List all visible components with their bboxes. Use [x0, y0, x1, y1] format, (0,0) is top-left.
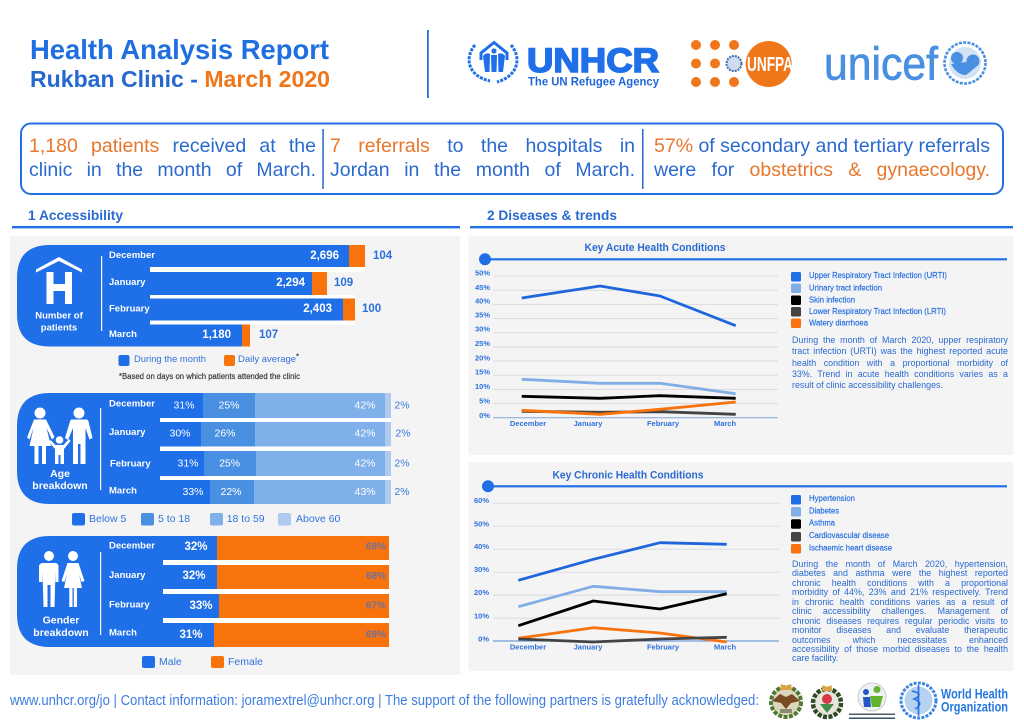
logo: Jordan crest two	[813, 685, 841, 717]
chart: gender breakdown: 32%	[184, 541, 208, 553]
chart: age breakdown: breakdown	[32, 480, 88, 492]
title	[30, 34, 330, 92]
legend: patients: During the month	[134, 354, 206, 365]
legend: age: 18 to 59	[227, 513, 265, 525]
logo: WHO: World Health	[941, 686, 1008, 702]
icon: family	[27, 408, 92, 464]
chart: chronic line chart: February	[647, 642, 680, 652]
panel: acute conditions: Key Acute Health Conditions	[584, 242, 726, 254]
heading: diseases and trends: 2 Diseases & trends	[487, 208, 617, 223]
chart: number of patients: patients	[41, 322, 77, 334]
chart: age breakdown: 42%	[354, 400, 376, 412]
legend: patients: *	[296, 353, 299, 360]
text: chronic commentary: outcomes which necessitates enhanced	[792, 635, 1008, 645]
legend: age	[72, 513, 341, 526]
chart: acute line chart: 10%	[475, 382, 490, 391]
text: chronic commentary: During the month of March 2020, hypertension,	[792, 559, 1008, 569]
text: chronic commentary: morbidity of 44%, 23% and 21% respectively. Trend	[792, 587, 1008, 597]
chart: age breakdown: 2%	[394, 486, 410, 498]
summary: referrals: 7 referrals to the hospitals in	[330, 135, 635, 157]
partner logos	[771, 683, 1008, 719]
legend: acute: Skin infection	[809, 296, 855, 304]
chart: chronic line chart: March	[714, 642, 736, 652]
text: acute commentary: result of clinic accessibility challenges.	[792, 380, 943, 390]
chart: gender breakdown: 68%	[366, 542, 386, 552]
chart: number of patients: 2,696	[310, 250, 339, 262]
text: chronic commentary: chronic health conditions with a proportional	[792, 578, 1008, 588]
chart: gender breakdown: January	[109, 570, 146, 581]
chart: acute line chart: 45%	[475, 283, 490, 292]
chart: gender breakdown: 33%	[189, 600, 213, 612]
chart: acute line chart: 35%	[475, 310, 490, 320]
legend: patients	[118, 353, 300, 381]
legend: acute: Urinary tract infection	[809, 284, 882, 292]
chart: age breakdown: 31%	[177, 458, 199, 470]
chart: number of patients: December	[109, 250, 155, 261]
chart: acute line chart: 20%	[475, 354, 490, 362]
chart: acute line chart: February	[647, 419, 680, 428]
logo: UNFPA	[691, 40, 793, 87]
legend: patients: *Based on days on which patients attended the clinic	[119, 372, 300, 381]
summary: obstetrics: 57% of secondary and tertiary referrals	[654, 135, 990, 157]
summary box	[21, 124, 1003, 194]
text: chronic commentary	[792, 559, 1008, 663]
summary: patients: 1,180 patients received at the	[29, 135, 316, 157]
chart: acute line chart: 50%	[475, 268, 490, 278]
chart: number of patients: 107	[259, 329, 278, 341]
text: acute commentary	[792, 335, 1008, 390]
logo: WHO	[901, 683, 1008, 718]
chart: gender breakdown	[17, 536, 389, 668]
chart: age breakdown: 42%	[354, 428, 376, 440]
summary: patients: clinic in the month of March.	[29, 159, 316, 181]
chart: gender breakdown: breakdown	[33, 627, 89, 639]
chart: gender breakdown: Gender	[43, 614, 79, 626]
icon: man and woman	[39, 551, 84, 607]
text: chronic commentary: diabetes and asthma were the highest reported	[792, 568, 1008, 578]
summary: obstetrics: were for obstetrics & gynaecology.	[654, 159, 990, 181]
chart: acute line chart: 5%	[479, 396, 490, 406]
text: acute commentary: 33%. Trend in acute health conditions varies as a	[792, 369, 1008, 379]
chart: age breakdown: January	[109, 427, 146, 438]
legend: chronic: Diabetes	[809, 506, 839, 516]
chart: chronic line chart: 0%	[478, 634, 489, 644]
legend: gender: Male	[159, 656, 182, 668]
legend: acute: Watery diarrhoea	[809, 318, 869, 328]
panel: chronic conditions: Key Chronic Health Conditions	[552, 470, 704, 482]
chart: chronic line chart: January	[574, 642, 603, 652]
chart: gender breakdown: 67%	[366, 600, 386, 612]
chart: acute line chart: 30%	[475, 324, 490, 334]
text: chronic commentary: accessibility of those morbid diseases to the health	[792, 644, 1008, 654]
chart: age breakdown: February	[110, 458, 151, 470]
chart: age breakdown: 30%	[169, 428, 191, 440]
legend: age: Below 5	[89, 513, 127, 525]
chart: acute line chart: 25%	[475, 339, 490, 348]
chart: gender breakdown: 69%	[366, 630, 386, 640]
chart: age breakdown	[17, 393, 411, 526]
summary: referrals: Jordan in the month of March.	[330, 159, 635, 181]
chart: number of patients: 100	[362, 303, 381, 315]
chart: chronic line chart: 30%	[474, 565, 489, 574]
logo: UNHCR	[469, 42, 660, 88]
legend: age: Above 60	[296, 513, 341, 525]
chart: age breakdown: 25%	[218, 400, 240, 412]
chart: acute line chart	[475, 268, 778, 428]
chart: acute line chart: March	[714, 419, 736, 428]
text: chronic commentary: care facility.	[792, 653, 838, 663]
legend: gender	[142, 656, 263, 668]
chart: chronic line chart: 40%	[474, 542, 489, 551]
text: acute commentary: During the month of March 2020, upper respiratory	[792, 335, 1008, 345]
text: acute commentary: health condition with a proportional morbidity of	[792, 358, 1008, 368]
title: Rukban Clinic - March 2020	[30, 66, 330, 92]
chart: acute line chart: December	[510, 419, 546, 428]
icon: clinic	[36, 257, 82, 304]
legend: chronic: Hypertension	[809, 494, 855, 503]
heading: accessibility: 1 Accessibility	[28, 208, 123, 223]
chart: chronic line chart: 50%	[474, 520, 489, 528]
chart: number of patients: 1,180	[202, 329, 231, 341]
title: Health Analysis Report	[30, 34, 329, 65]
chart: age breakdown: 22%	[220, 486, 242, 498]
chart: age breakdown: March	[109, 486, 137, 496]
text: chronic commentary: in chronic health conditions varies as a result of	[792, 597, 1008, 607]
logo: WHO: Organization	[941, 700, 1008, 714]
legend: acute: Upper Respiratory Tract Infection (URTI)	[809, 271, 947, 280]
chart: number of patients: 104	[373, 250, 393, 262]
legend: patients: Daily average	[238, 354, 296, 365]
chart: age breakdown: 33%	[182, 486, 204, 498]
chart: number of patients: Number of	[35, 310, 84, 322]
legend: acute	[791, 271, 947, 328]
logo: partner society	[849, 683, 895, 719]
legend: chronic: Cardiovascular disease	[809, 531, 890, 540]
text: chronic commentary: chronic diseases requires regular periodic visits to	[792, 616, 1008, 626]
chart: chronic line chart	[474, 496, 779, 652]
chart: number of patients	[17, 245, 393, 381]
chart: gender breakdown: 31%	[179, 629, 203, 641]
chart: chronic line chart: 60%	[474, 496, 489, 505]
chart: number of patients: 2,294	[276, 277, 306, 289]
panel: acute conditions	[468, 236, 1014, 455]
panel: chronic conditions	[468, 462, 1014, 671]
summary: obstetrics	[654, 135, 990, 181]
chart: age breakdown: 42%	[354, 458, 376, 470]
logo: UNHCR: The UN Refugee Agency	[528, 76, 660, 88]
chart: gender breakdown: December	[109, 540, 155, 552]
chart: age breakdown: December	[109, 398, 155, 410]
chart: age breakdown: 31%	[173, 400, 195, 412]
chart: gender breakdown: March	[109, 628, 137, 638]
chart: age breakdown: 2%	[395, 428, 411, 440]
chart: gender breakdown: February	[109, 600, 150, 610]
summary: patients	[29, 135, 316, 181]
chart: gender breakdown: 68%	[366, 571, 386, 582]
chart: age breakdown: 25%	[219, 458, 240, 470]
chart: age breakdown: 2%	[394, 400, 410, 412]
chart: age breakdown: 26%	[214, 428, 236, 440]
chart: number of patients: 109	[334, 277, 353, 289]
legend: chronic	[791, 494, 893, 554]
legend: gender: Female	[228, 656, 263, 668]
logo: unicef: unicef	[824, 38, 938, 90]
chart: chronic line chart: 10%	[474, 612, 489, 620]
chart: chronic line chart: 20%	[474, 588, 489, 597]
chart: number of patients: February	[109, 304, 150, 314]
chart: acute line chart: 15%	[475, 368, 490, 376]
text: chronic commentary: clinic accessibility challenges. Management of	[792, 606, 1008, 616]
logo: Jordan crest one	[771, 684, 801, 717]
text: acute commentary: tract infection (URTI) was the highest reported acute	[792, 346, 1008, 356]
chart: chronic line chart: December	[510, 642, 546, 652]
chart: age breakdown: Age	[50, 468, 70, 480]
chart: number of patients: March	[109, 329, 137, 340]
chart: acute line chart: 40%	[475, 296, 490, 306]
legend: chronic: Asthma	[809, 518, 836, 528]
footer text: www.unhcr.org/jo | Contact information: joramextrel@unhcr.org | The support of the following partners is gratefully acknowledged:	[9, 693, 759, 709]
chart: number of patients: January	[109, 277, 146, 288]
logo: UNHCR: UNHCR	[527, 42, 659, 80]
logo: UNFPA: UNFPA	[747, 54, 793, 76]
text: chronic commentary: monitor diseases and evaluate therapeutic	[792, 625, 1008, 635]
chart: acute line chart: 0%	[479, 411, 490, 420]
summary: referrals	[330, 135, 635, 181]
legend: age: 5 to 18	[158, 513, 190, 525]
chart: acute line chart: January	[574, 419, 603, 428]
chart: age breakdown: 2%	[394, 458, 410, 470]
chart: gender breakdown: 32%	[182, 570, 206, 582]
chart: age breakdown: 43%	[354, 486, 376, 498]
chart: number of patients: 2,403	[303, 303, 332, 315]
legend: chronic: Ischaemic heart disease	[809, 544, 893, 552]
panel: accessibility	[9, 236, 1013, 719]
legend: acute: Lower Respiratory Tract Infection (LRTI)	[809, 307, 946, 316]
